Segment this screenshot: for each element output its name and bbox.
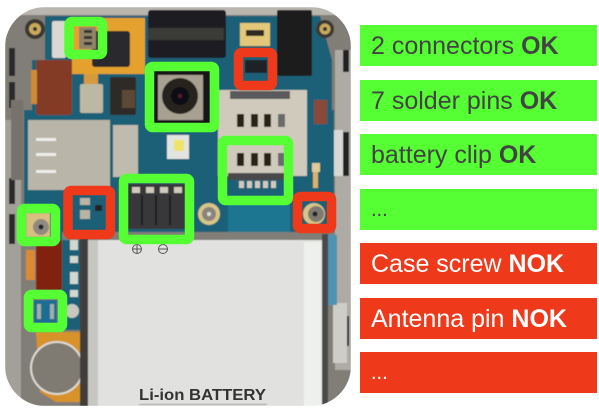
SIM holder [218,90,307,188]
mounting screw top left [25,19,45,39]
battery label underline [139,404,267,405]
label: more NOK items: ... [371,362,388,384]
audio jack [277,10,312,76]
marker: battery connector OK [124,178,190,240]
white shield top left [52,21,66,58]
marker: lower chip OK [28,294,62,328]
brown pad right [314,100,327,124]
left screw [26,213,50,237]
battery connector [128,184,188,229]
label: 7 solder pins OK: 7 solder pins OK [371,87,557,115]
left chip area [79,197,102,220]
chip under red marker [245,60,267,73]
label: Antenna pin NOK [360,298,597,339]
polarity symbols [132,244,168,254]
marker: left screw OK [22,208,56,242]
dark component [110,77,136,115]
case screw under red marker [303,203,325,225]
case divider [80,238,88,406]
phone photo [5,7,351,406]
marker: case screw NOK [298,196,332,228]
label: battery clip OK [360,134,597,175]
lower chip [34,300,57,323]
label: 2 connectors OK [360,25,597,66]
marker: camera OK [150,66,214,128]
white pads [70,240,78,297]
label: battery clip OK: battery clip OK [371,141,536,169]
circuit board [24,16,332,330]
camera [154,71,210,123]
vibration motor [30,341,84,395]
battery [88,234,328,406]
mounting screw top right [316,20,334,38]
label: Case screw NOK: Case screw NOK [371,250,564,278]
orange flex cable and chip [72,18,145,84]
contact button [65,304,79,318]
marker: battery clip OK [222,140,288,200]
marker: left chip NOK [68,190,110,234]
label: more OK items: ... [371,199,388,221]
LED flash [167,135,189,159]
small metal shield [113,125,138,177]
gold contact [240,23,270,46]
antenna pin [312,163,320,188]
vibration motor flex [36,332,82,402]
label: more NOK items [360,352,597,393]
large metal shield [28,120,110,190]
label: 7 solder pins OK [360,80,597,121]
small silver component [80,84,103,113]
label: Antenna pin NOK: Antenna pin NOK [371,305,567,333]
marker: connector top-left OK [69,22,102,54]
board screw [198,203,220,225]
red connector lower left [36,240,62,290]
label: more OK items [360,189,597,230]
photo: phone circuit board with inspection boxes [5,7,351,406]
battery label: Li-ion BATTERY [139,387,267,404]
brown connector [36,60,72,115]
marker: chip NOK [238,52,272,86]
label: 2 connectors OK: 2 connectors OK [371,32,559,60]
label: Case screw NOK [360,243,597,284]
dark module [148,10,226,58]
